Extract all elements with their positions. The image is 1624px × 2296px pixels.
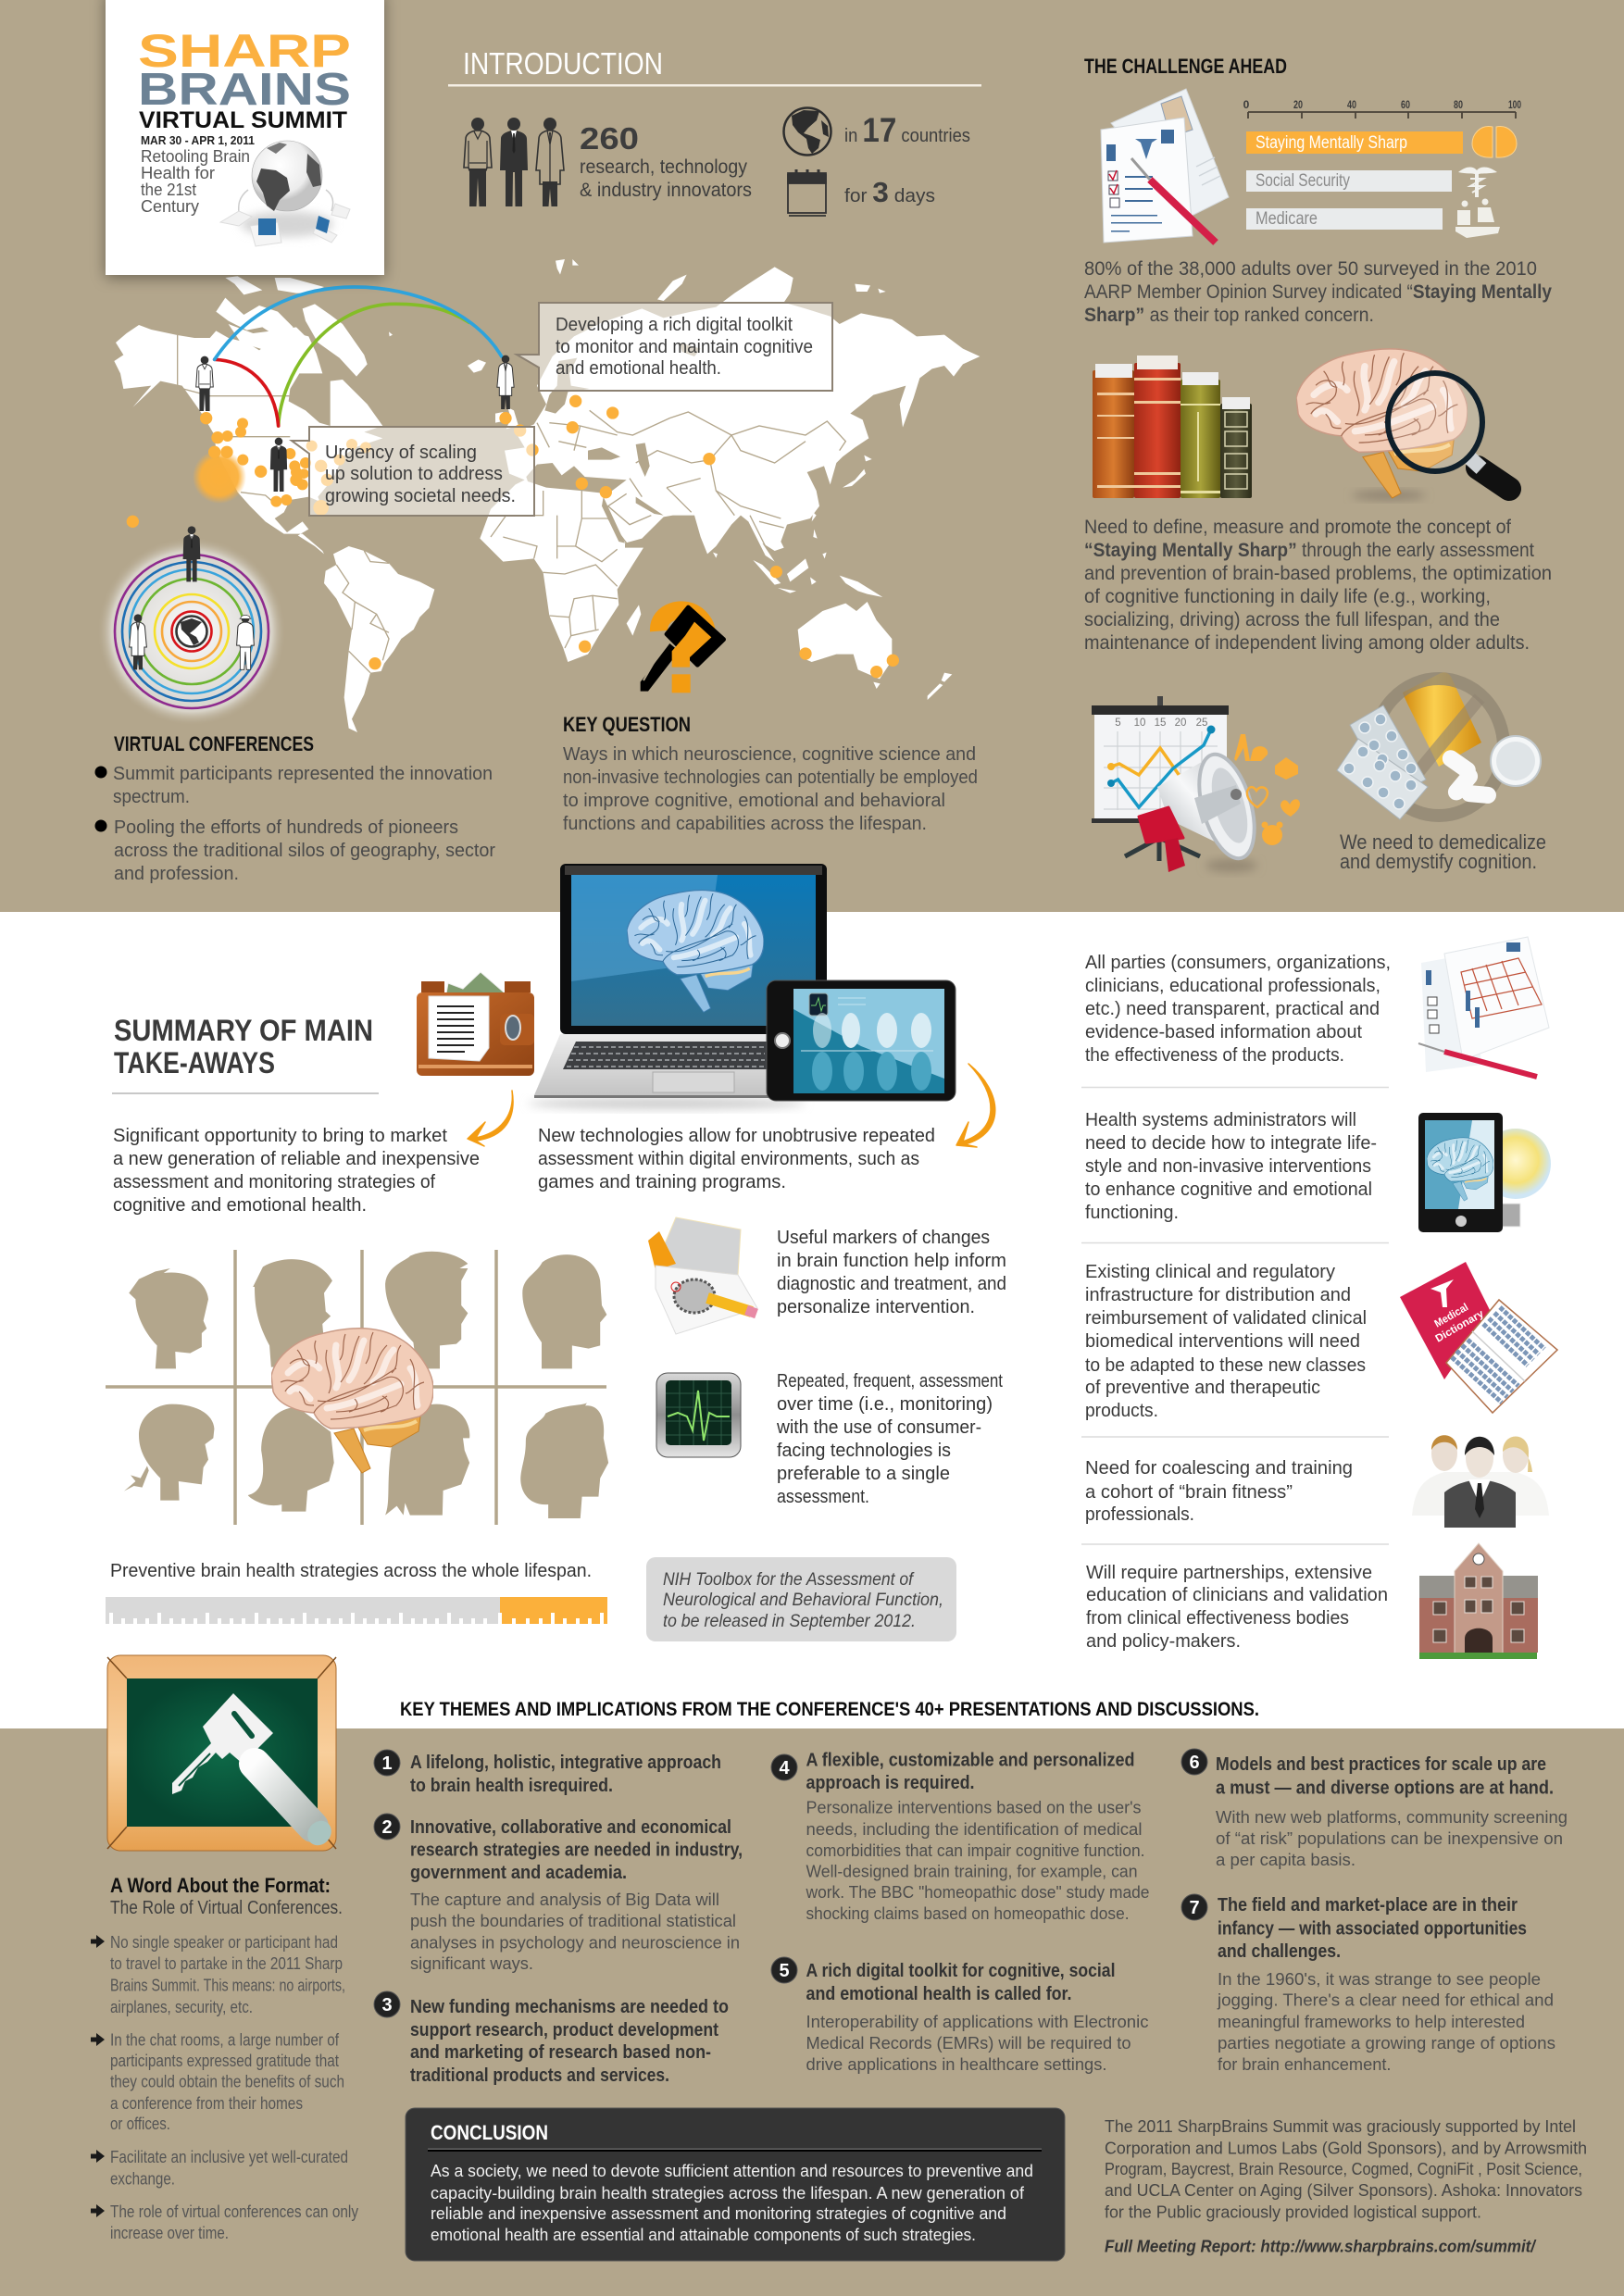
theme 5: Medical Records (EMRs) will be required to	[806, 2033, 1131, 2053]
panel: conclusion: capacity-building brain health strategies across the lifespan. A new generation of	[431, 2183, 1025, 2202]
text: significant opportunity: cognitive and emotional health.	[113, 1195, 367, 1216]
chart axis: 100	[1508, 98, 1521, 111]
chart axis: 20	[1293, 98, 1303, 111]
text: staying mentally sharp concept	[1084, 517, 1552, 654]
text: staying mentally sharp concept: maintenance of independent living among older adults.	[1084, 632, 1530, 654]
text: survey result: 80% of the 38,000 adults over 50 surveyed in the 2010	[1084, 258, 1537, 280]
text: all parties: clinicians, educational professionals,	[1085, 975, 1380, 996]
text: brain fitness professionals	[1085, 1457, 1353, 1525]
theme 4: shocking claims based on homeopathic dose.	[806, 1903, 1130, 1923]
theme 6	[1181, 1749, 1568, 1869]
text: all parties: evidence-based information about	[1085, 1021, 1362, 1042]
theme 7: The field and market-place are in their	[1218, 1894, 1518, 1915]
text: new technologies: games and training programs.	[538, 1172, 786, 1192]
text: clinical infrastructure: products.	[1085, 1400, 1158, 1421]
bar: medicare: Medicare	[1255, 209, 1318, 229]
text: new technologies	[538, 1126, 935, 1192]
icon: medical dictionary: Medical	[1433, 1302, 1470, 1330]
text block: key question: KEY QUESTION	[563, 713, 691, 736]
theme 3	[374, 1991, 729, 2086]
callout: NIH Toolbox: Neurological and Behavioral Function,	[663, 1591, 943, 1610]
stat: 260 innovators	[580, 121, 752, 201]
icon: brain under magnifying glass	[1296, 349, 1509, 500]
icon: monitor with ECG	[656, 1373, 741, 1457]
text block: a word about the format: exchange.	[110, 2170, 175, 2189]
theme 2	[374, 1814, 743, 1973]
text: clinical infrastructure: to be adapted to these new classes	[1085, 1354, 1366, 1376]
text block: key question: to improve cognitive, emotional and behavioral	[563, 791, 945, 811]
text block: a word about the format: Brains Summit. This means: no airports,	[110, 1976, 345, 1994]
text: clinical infrastructure: reimbursement of validated clinical	[1085, 1307, 1367, 1329]
icon: patient and doctor	[1455, 198, 1500, 238]
theme 5	[771, 1957, 1148, 2074]
icon: globe with laptops	[220, 141, 350, 246]
theme 6: Models and best practices for scale up are	[1216, 1753, 1546, 1775]
text: demedicalize: and demystify cognition.	[1340, 850, 1537, 873]
theme 5: 5	[779, 1961, 790, 1981]
theme 3: traditional products and services.	[410, 2065, 669, 2086]
text: clinical infrastructure: biomedical interventions will need	[1085, 1330, 1360, 1352]
theme 6: of “at risk” populations can be inexpensive on	[1216, 1828, 1563, 1848]
text block: a word about the format: No single speaker or participant had	[110, 1933, 338, 1952]
text: significant opportunity	[113, 1126, 480, 1216]
callout: urgency of scaling: growing societal needs.	[325, 485, 516, 506]
text: survey result: AARP Member Opinion Survey indicated “Staying Mentally	[1084, 281, 1552, 303]
text: repeated assessment: assessment.	[777, 1487, 869, 1507]
theme 5: A rich digital toolkit for cognitive, social	[806, 1960, 1115, 1981]
logo: Sharp Brains wordmark: BRAINS	[138, 65, 351, 115]
theme 3: 3	[381, 1995, 393, 2015]
world map	[114, 259, 980, 732]
heading: summary of main take-aways	[112, 1014, 379, 1094]
theme 4: Well-designed brain training, for example, can	[806, 1861, 1137, 1881]
text: sponsors	[1105, 2116, 1587, 2222]
theme 2: 2	[381, 1817, 393, 1838]
stat: 260 innovators: research, technology	[580, 156, 747, 178]
theme 4: approach is required.	[806, 1772, 974, 1793]
text: staying mentally sharp concept: “Staying Mentally Sharp” through the early assessment	[1084, 540, 1534, 561]
stat: 260 innovators: & industry innovators	[580, 180, 752, 201]
icon: three professionals	[1412, 1435, 1549, 1528]
heading: summary of main take-aways: SUMMARY OF MAIN	[114, 1014, 373, 1047]
text: repeated assessment: Repeated, frequent, assessment	[777, 1371, 1003, 1391]
text: health systems	[1085, 1109, 1377, 1223]
icon: orange brain	[1472, 127, 1517, 157]
icon: chart board with megaphone: 15	[1155, 718, 1166, 729]
text block: virtual conferences: VIRTUAL CONFERENCES	[114, 732, 314, 755]
text block: virtual conferences: spectrum.	[113, 787, 190, 807]
text: partnerships: from clinical effectiveness bodies	[1086, 1607, 1349, 1628]
graphic: lifespan ruler bar	[106, 1597, 607, 1624]
panel: conclusion: CONCLUSION	[431, 2121, 548, 2144]
icon: globe americas	[783, 107, 831, 156]
callout: digital toolkit: to monitor and maintain cognitive	[556, 336, 813, 357]
text: tagline	[141, 147, 250, 216]
callout: NIH Toolbox: NIH Toolbox for the Assessment of	[663, 1570, 915, 1590]
theme 4: 4	[779, 1758, 790, 1778]
icon: books	[1093, 356, 1252, 498]
text block: a word about the format: to travel to partake in the 2011 Sharp	[110, 1954, 343, 1973]
rings diagram: innovation spectrum	[97, 526, 286, 726]
text: health systems: functioning.	[1085, 1202, 1179, 1223]
section: introduction	[448, 46, 981, 216]
theme 7: meaningful frameworks to help interested	[1218, 2012, 1525, 2031]
conference location dots	[127, 395, 899, 678]
icon: person in suit on map	[270, 438, 287, 492]
callout: digital toolkit: and emotional health.	[556, 357, 721, 379]
text: staying mentally sharp concept: of cognitive functioning in daily life (e.g., working,	[1084, 586, 1491, 607]
text block: a word about the format: The Role of Virtual Conferences.	[110, 1898, 343, 1918]
text: repeated assessment: preferable to a single	[777, 1464, 950, 1484]
text block: a word about the format: increase over time.	[110, 2224, 229, 2242]
text: useful markers: Useful markers of changes	[777, 1228, 990, 1248]
theme 5: and emotional health is called for.	[806, 1983, 1072, 2004]
theme 2: government and academia.	[410, 1862, 627, 1883]
text: partnerships: and policy-makers.	[1086, 1630, 1241, 1652]
theme 4: work. The BBC "homeopathic dose" study made	[806, 1882, 1150, 1902]
heading: key themes: KEY THEMES AND IMPLICATIONS FROM THE CONFERENCE'S 40+ PRESENTATIONS AND DISCUSSIONS.	[400, 1699, 1259, 1720]
arrow: tablet to technology text	[956, 1064, 995, 1147]
bar: social security	[1246, 170, 1452, 192]
icons: orange lifestyle symbols	[1234, 734, 1300, 845]
text: health systems: to enhance cognitive and emotional	[1085, 1179, 1372, 1200]
logo: Sharp Brains wordmark: SHARP	[138, 25, 351, 77]
theme 1: to brain health isrequired.	[410, 1775, 613, 1796]
heading: the challenge ahead: THE CHALLENGE AHEAD	[1084, 55, 1287, 78]
stat: 260 innovators: 260	[580, 121, 639, 156]
callout: NIH Toolbox	[646, 1557, 956, 1641]
text block: key question: non-invasive technologies can potentially be employed	[563, 767, 978, 788]
icon: brain sketch with pencil	[648, 1217, 757, 1334]
callout: urgency of scaling: Urgency of scaling	[325, 442, 477, 463]
logo card	[106, 0, 384, 275]
icon: tablet with head silhouettes	[767, 980, 956, 1101]
arrow: wallet to opportunity text	[468, 1091, 513, 1146]
text: clinical infrastructure: Existing clinical and regulatory	[1085, 1261, 1336, 1282]
text: tagline: Retooling Brain	[141, 147, 250, 166]
text: health systems: need to decide how to integrate life-	[1085, 1132, 1377, 1154]
icon: chalkboard with key	[107, 1655, 336, 1851]
theme 4: needs, including the identification of medical	[806, 1819, 1143, 1839]
chart axis: 0	[1243, 98, 1250, 111]
text block: virtual conferences: across the traditional silos of geography, sector	[114, 841, 495, 861]
heading: introduction: INTRODUCTION	[463, 46, 663, 81]
panel: white summary band	[0, 912, 1624, 1728]
text: preventive brain health: Preventive brain health strategies across the whole lifespan.	[110, 1561, 592, 1581]
panel: bottom tan background	[0, 1728, 1624, 2296]
text: partnerships: Will require partnerships, extensive	[1086, 1562, 1372, 1583]
panel: conclusion	[406, 2108, 1065, 2261]
theme 7: parties negotiate a growing range of options	[1218, 2033, 1555, 2053]
theme 2: Innovative, collaborative and economical	[410, 1816, 731, 1838]
theme 1: A lifelong, holistic, integrative approach	[410, 1752, 721, 1773]
text: new technologies: assessment within digital environments, such as	[538, 1149, 919, 1169]
text: all parties: All parties (consumers, organizations,	[1085, 952, 1391, 973]
icon: wallet with money	[417, 972, 534, 1076]
rule	[448, 84, 981, 87]
theme 7: for brain enhancement.	[1218, 2054, 1391, 2074]
text: repeated assessment: over time (i.e., monitoring)	[777, 1394, 993, 1415]
connecting arcs	[215, 287, 502, 426]
theme 3: New funding mechanisms are needed to	[410, 1996, 729, 2017]
theme 7: infancy — with associated opportunities	[1218, 1918, 1527, 1939]
callout: urgency of scaling: up solution to address	[325, 463, 503, 484]
callout: digital toolkit	[517, 303, 832, 391]
bar: staying mentally sharp: Staying Mentally Sharp	[1255, 133, 1407, 153]
theme 2: research strategies are needed in industry,	[410, 1839, 743, 1861]
text block: key question: Ways in which neuroscience, cognitive science and	[563, 744, 976, 765]
text: useful markers: diagnostic and treatment, and	[777, 1274, 1006, 1294]
text: repeated assessment: with the use of consumer-	[776, 1417, 981, 1438]
chart axis: 40	[1347, 98, 1356, 111]
text: survey result: Sharp” as their top ranked concern.	[1084, 305, 1374, 326]
text: brain fitness professionals: Need for coalescing and training	[1085, 1457, 1353, 1479]
text: tagline: Century	[141, 197, 199, 216]
theme 6: a per capita basis.	[1216, 1850, 1355, 1869]
text: tagline: the 21st	[141, 181, 196, 199]
text: all parties: the effectiveness of the products.	[1085, 1044, 1344, 1066]
text: sponsors: The 2011 SharpBrains Summit was graciously supported by Intel	[1105, 2116, 1576, 2136]
text: brain fitness professionals: professionals.	[1085, 1504, 1194, 1525]
panel: top tan background	[0, 0, 1624, 912]
text: sponsors: Corporation and Lumos Labs (Gold Sponsors), and by Arrowsmith	[1105, 2139, 1587, 2157]
text: significant opportunity: a new generation of reliable and inexpensive	[113, 1149, 480, 1169]
icon: person casual on map	[196, 356, 213, 411]
icon: chart board with megaphone: 20	[1175, 718, 1186, 729]
text: staying mentally sharp concept: and prevention of brain-based problems, the optimization	[1084, 563, 1552, 584]
text: new technologies: New technologies allow for unobtrusive repeated	[538, 1126, 935, 1146]
theme 2: analyses in psychology and neuroscience in	[410, 1933, 740, 1952]
text: health systems: style and non-invasive interventions	[1085, 1155, 1371, 1177]
text: staying mentally sharp concept: socializing, driving) across the full lifespan, and the	[1084, 609, 1500, 630]
text: survey result	[1084, 258, 1552, 326]
text block: a word about the format	[91, 1874, 358, 2242]
icon: laptop with blue brain	[528, 864, 827, 1109]
text: demedicalize	[1340, 830, 1546, 873]
theme 3: support research, product development	[410, 2019, 718, 2040]
icon: calendar	[788, 169, 826, 216]
logo: Sharp Brains wordmark	[138, 25, 351, 147]
text: significant opportunity: assessment and monitoring strategies of	[113, 1172, 435, 1192]
text block: a word about the format: Facilitate an inclusive yet well-curated	[110, 2148, 348, 2166]
text: staying mentally sharp concept: Need to define, measure and promote the concept of	[1084, 517, 1511, 538]
theme 7: jogging. There's a clear need for ethical and	[1217, 1990, 1554, 2009]
text: brain fitness professionals: a cohort of “brain fitness”	[1085, 1481, 1293, 1503]
theme 4: A flexible, customizable and personalized	[806, 1750, 1135, 1770]
text: sponsors: for the Public graciously provided logistical support.	[1105, 2202, 1481, 2222]
text block: virtual conferences: and profession.	[114, 864, 239, 884]
text block: key question	[563, 713, 978, 834]
text: useful markers: personalize intervention.	[777, 1297, 975, 1317]
theme 7: 7	[1189, 1898, 1200, 1918]
theme 4: Personalize interventions based on the user's	[806, 1798, 1141, 1816]
logo: Sharp Brains wordmark: VIRTUAL SUMMIT	[139, 107, 347, 133]
text block: virtual conferences: Summit participants represented the innovation	[113, 764, 493, 784]
theme 6: a must — and diverse options are at hand.	[1216, 1778, 1554, 1798]
stat: 17 countries: in 17 countries	[844, 111, 970, 149]
icon: key question mark	[641, 607, 724, 693]
theme 7: and challenges.	[1218, 1940, 1341, 1962]
text: repeated assessment: facing technologies is	[777, 1441, 951, 1461]
text block: a word about the format: or offices.	[110, 2115, 170, 2133]
text block: a word about the format: a conference from their homes	[110, 2094, 303, 2113]
theme 5: drive applications in healthcare settings.	[806, 2054, 1107, 2074]
text: clinical infrastructure	[1085, 1261, 1367, 1421]
panel: conclusion: As a society, we need to devote sufficient attention and resources to preventive and	[431, 2161, 1033, 2180]
text block: a word about the format: participants expressed gratitude that	[110, 2052, 339, 2070]
text: partnerships	[1086, 1562, 1388, 1652]
theme 4: comorbidities that can impair cognitive function.	[806, 1841, 1144, 1860]
text: significant opportunity: Significant opportunity to bring to market	[113, 1126, 447, 1146]
text: useful markers: in brain function help inform	[777, 1251, 1006, 1271]
text: all parties	[1085, 952, 1391, 1066]
theme 3: and marketing of research based non-	[410, 2041, 711, 2063]
text block: a word about the format: The role of virtual conferences can only	[110, 2202, 358, 2221]
text block: a word about the format: airplanes, security, etc.	[110, 1998, 253, 2016]
icon: caduceus	[1458, 167, 1497, 197]
theme 2: significant ways.	[410, 1953, 533, 1973]
text: health systems: Health systems administrators will	[1085, 1109, 1356, 1130]
text block: a word about the format: they could obtain the benefits of such	[110, 2072, 344, 2090]
theme 7	[1181, 1894, 1555, 2074]
icon: university building	[1419, 1543, 1538, 1659]
theme 1	[374, 1750, 721, 1796]
icon: chart board with megaphone: 25	[1196, 718, 1207, 729]
icon: forms and chart with pen	[1418, 937, 1549, 1077]
text block: key question: functions and capabilities across the lifespan.	[563, 814, 927, 834]
icon: medical forms with pen	[1101, 89, 1229, 243]
callout: NIH Toolbox: to be released in September 2012.	[663, 1612, 916, 1631]
heading: summary of main take-aways: TAKE-AWAYS	[114, 1046, 275, 1079]
theme 2: The capture and analysis of Big Data will	[410, 1890, 719, 1909]
theme 4	[771, 1750, 1150, 1923]
icon: person in lab coat on map	[497, 356, 514, 409]
text block: virtual conferences	[94, 732, 495, 884]
bar: social security: Social Security	[1255, 171, 1350, 191]
theme 1: 1	[381, 1753, 393, 1774]
icon: pills with prohibition sign	[1337, 672, 1541, 819]
theme 2: push the boundaries of traditional statistical	[410, 1911, 736, 1930]
theme 5: Interoperability of applications with Electronic	[806, 2012, 1148, 2031]
graphic: lifespan heads grid with brain	[106, 1250, 608, 1525]
text: clinical infrastructure: of preventive and therapeutic	[1085, 1377, 1320, 1398]
icon: medical dictionary: Dictionary	[1433, 1308, 1486, 1345]
text: repeated assessment	[776, 1371, 1003, 1507]
icon: chart board with megaphone: 5	[1115, 718, 1121, 729]
text: clinical infrastructure: infrastructure for distribution and	[1085, 1284, 1351, 1305]
chart axis: 80	[1454, 98, 1463, 111]
chart axis	[1243, 98, 1521, 119]
text: partnerships: education of clinicians and validation	[1086, 1584, 1388, 1605]
text block: virtual conferences: Pooling the efforts of hundreds of pioneers	[114, 817, 458, 838]
bar chart: top concerns	[1243, 98, 1521, 238]
icon: chart board with megaphone	[1092, 696, 1265, 872]
chart axis: 60	[1401, 98, 1410, 111]
text: demedicalize: We need to demedicalize	[1340, 830, 1546, 854]
icon: tablet and light bulb	[1418, 1113, 1551, 1232]
icon: three participants	[464, 118, 564, 206]
stat: 3 days: for 3 days	[844, 176, 935, 208]
text: useful markers	[777, 1228, 1006, 1317]
icon: medical dictionary	[1400, 1262, 1557, 1413]
bar: medicare	[1246, 208, 1443, 230]
text: tagline: Health for	[141, 164, 215, 182]
text: full meeting report link: Full Meeting Report: http://www.sharpbrains.com/summit/	[1105, 2237, 1537, 2255]
panel: conclusion: emotional health are essential and attainable components of such strategies.	[431, 2225, 976, 2244]
theme 6: With new web platforms, community screening	[1216, 1807, 1568, 1827]
text block: a word about the format: In the chat rooms, a large number of	[110, 2031, 340, 2050]
text block: a word about the format: A Word About the Format:	[110, 1874, 331, 1897]
icon: chart board with megaphone: 10	[1134, 718, 1145, 729]
panel: conclusion: reliable and inexpensive assessment and monitoring strategies of cognitive and	[431, 2203, 1006, 2223]
logo: Sharp Brains wordmark: MAR 30 - APR 1, 2011	[141, 134, 255, 147]
text: sponsors: and UCLA Center on Aging (Silver Sponsors). Ashoka: Innovators	[1105, 2180, 1582, 2200]
theme 7: In the 1960's, it was strange to see people	[1218, 1969, 1541, 1989]
theme 6: 6	[1189, 1753, 1200, 1773]
callout: digital toolkit: Developing a rich digital toolkit	[556, 314, 793, 335]
callout: urgency of scaling	[292, 427, 534, 516]
text: all parties: etc.) need transparent, practical and	[1085, 998, 1380, 1019]
